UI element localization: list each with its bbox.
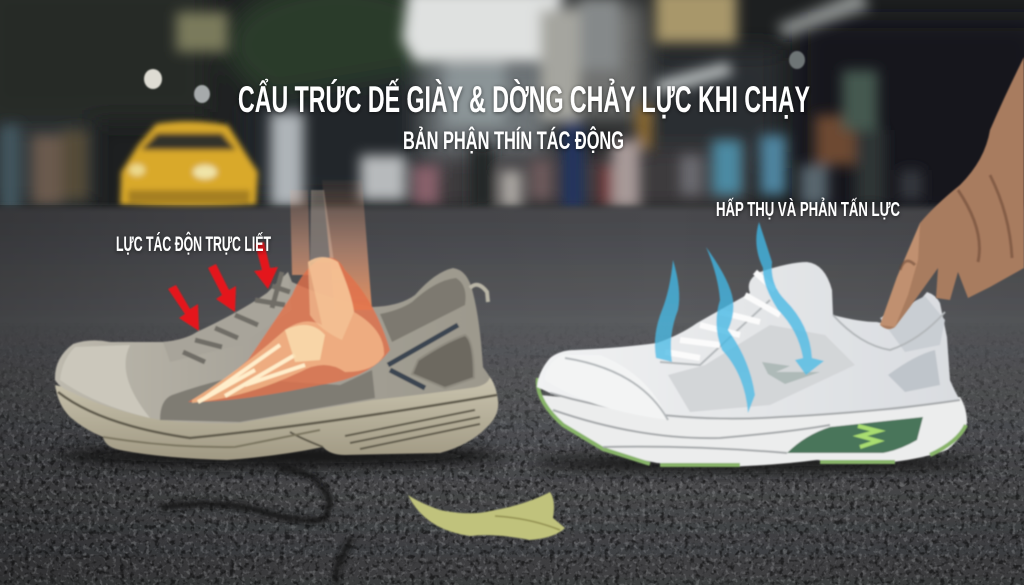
green sole trim [538, 378, 966, 465]
worn shoe heel loop [470, 285, 488, 302]
new shoe stitch lines [565, 300, 945, 420]
label: absorption and dispersion: HẤP THỤ VÀ PHẢN TẤN LỰC [716, 198, 900, 221]
worn shoe upper [55, 268, 490, 423]
new shoe upper [537, 262, 960, 420]
subtitle: BẢN PHẬN THÍN TÁC ĐỘNG [403, 125, 624, 155]
blue swooshes [655, 222, 824, 413]
new shoe toe panel [545, 355, 668, 420]
worn shoe sole [55, 377, 498, 460]
red arrows [168, 242, 278, 331]
hand and wrist [880, 57, 1024, 329]
blurred street background [0, 0, 1024, 225]
swoosh 1 [655, 260, 679, 362]
swoosh 3 [756, 222, 824, 375]
green cushion spring window [787, 417, 923, 453]
orange heat zone [188, 258, 390, 402]
knuckle creases [900, 175, 1012, 270]
ankle pressure beams [290, 180, 372, 310]
new shoe mesh panel [668, 325, 855, 412]
arrow 2 [208, 264, 236, 312]
road surface [0, 205, 1024, 585]
worn shoe lace eyelet panel [163, 272, 292, 362]
worn shoe mesh panel [160, 370, 375, 422]
worn shoe toe panel [60, 345, 150, 418]
worn shoe midsole lines [58, 392, 497, 438]
new shoe sole [540, 395, 967, 467]
worn shoe laces [183, 272, 290, 362]
shoe shadows [55, 444, 980, 473]
icon: blurred yellow taxi [120, 121, 258, 208]
new shoe midsole lines [550, 393, 960, 453]
new white shoe with cushioning [537, 222, 967, 467]
label: direct impact force: LỰC TÁC ĐỘN TRỰC LIẾT [116, 232, 271, 256]
worn shoe collar mesh [380, 278, 466, 342]
fallen leaf [408, 492, 565, 540]
new shoe laces [665, 272, 780, 358]
hand pressing the shoe [880, 57, 1024, 329]
swoosh 2 [706, 247, 755, 413]
worn shoe with foot x-ray [55, 180, 498, 460]
new shoe heel panel [888, 350, 940, 392]
foot bones [192, 257, 384, 403]
worn shoe heel panel [412, 335, 474, 388]
arrow 1 [168, 285, 199, 331]
bokeh lights [144, 51, 805, 103]
finger shading [880, 223, 920, 327]
green spring [858, 426, 878, 447]
arrow 3 [254, 242, 278, 289]
new shoe logo [762, 362, 820, 384]
